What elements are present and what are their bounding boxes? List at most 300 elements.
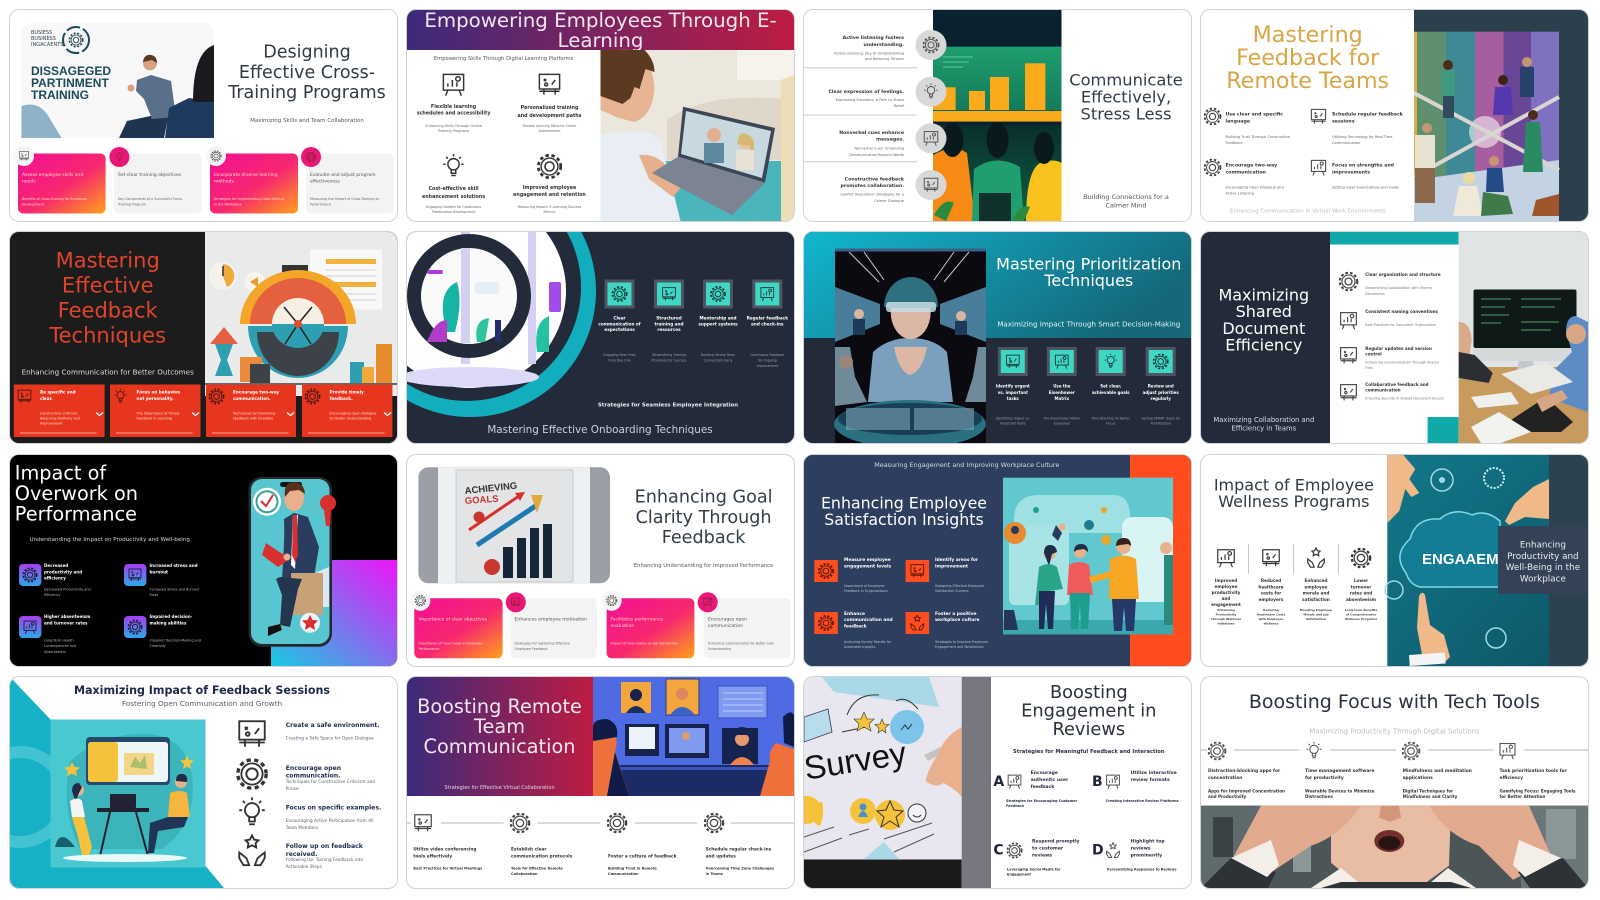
step: mentorship: support systems bbox=[698, 322, 738, 326]
item: specific examples: Encouraging Active Participation from All bbox=[286, 819, 374, 824]
illustration: bar chart and audience bbox=[933, 10, 1062, 220]
item: nonverbal cues: Nonverbal cues enhance bbox=[839, 130, 904, 136]
step: mindfulness: Digital Techniques for bbox=[1402, 788, 1453, 794]
tile: evaluate program bbox=[301, 146, 393, 213]
step: clear goals bbox=[1090, 347, 1131, 426]
callout: Workplace bbox=[1519, 574, 1565, 584]
step: mentorship bbox=[698, 280, 738, 362]
photo: team meeting around computer bbox=[1458, 232, 1588, 443]
step: time management: Wearable Devices to Minimize bbox=[1304, 788, 1374, 794]
item: nonverbal cues bbox=[839, 123, 946, 156]
item: clear language: Use clear and specific bbox=[1225, 112, 1283, 117]
item: specific examples: Team Members bbox=[285, 825, 319, 831]
tile: two-way communication bbox=[206, 384, 296, 437]
title: Effectively, bbox=[1081, 87, 1171, 106]
step: task prioritization: Task prioritization tools for bbox=[1499, 769, 1566, 774]
step: urgent vs important: Important Tasks bbox=[1000, 422, 1026, 426]
panel: Boosting Focus with Tech Tools bbox=[1200, 677, 1588, 888]
title: Shared bbox=[1235, 302, 1291, 321]
illustration: feedback gauge bbox=[205, 232, 397, 396]
item: improved engagement: Improved employee bbox=[523, 186, 576, 190]
step: video conferencing: Utilize video conferencing bbox=[413, 848, 476, 852]
step: review priorities bbox=[1141, 347, 1181, 426]
item: decreased productivity: Efficiency bbox=[44, 593, 60, 597]
column: productivity: and bbox=[1221, 596, 1230, 600]
column: productivity: Initiatives bbox=[1217, 621, 1234, 625]
item: strengths bbox=[1311, 160, 1399, 189]
subtitle: Maximizing Impact Through Smart Decision-Making bbox=[997, 319, 1180, 328]
item: active listening: and Reducing Tension bbox=[865, 57, 904, 61]
tile: assess employee skills bbox=[14, 146, 106, 213]
footer note: Enhancing Communication in Virtual Work Environments bbox=[1229, 208, 1385, 214]
item A: authentic user bbox=[1031, 777, 1069, 783]
tile: clear objectives: Performance bbox=[418, 647, 439, 651]
step: urgent vs important bbox=[996, 347, 1030, 426]
item: nonverbal cues: Nonverbal Cues: Enhancing bbox=[854, 146, 904, 150]
tile: focus on behavior bbox=[110, 384, 200, 437]
column: turnover: Wellness Programs bbox=[1344, 616, 1377, 620]
subtitle: Empowering Skills Through Digital Learning Platforms bbox=[434, 56, 574, 62]
title: Maximizing Impact of Feedback Sessions bbox=[74, 684, 330, 697]
tile: timely feedback: feedback. bbox=[330, 396, 353, 401]
item: strengths: Setting Clear Expectations and Goals bbox=[1332, 185, 1399, 189]
step: check-ins bbox=[705, 814, 774, 876]
photo: disaggregated training session bbox=[22, 22, 214, 138]
item: collaborative feedback: communication bbox=[1365, 388, 1400, 392]
title: Impact of Employee bbox=[1213, 475, 1373, 494]
item: positive culture bbox=[906, 610, 988, 648]
column: productivity: Through Wellness bbox=[1210, 616, 1241, 620]
title: Mastering bbox=[1252, 22, 1362, 48]
title: Designing bbox=[263, 42, 351, 62]
step: distraction-blocking: Distraction-blocking apps for bbox=[1208, 769, 1280, 774]
item: communication and feedback: communication and bbox=[844, 617, 893, 623]
step: regular feedback: for Ongoing bbox=[758, 358, 777, 362]
title: Engagement in bbox=[1021, 700, 1156, 722]
column: morale bbox=[1299, 547, 1332, 620]
step: communication protocols: Collaboration bbox=[511, 872, 538, 876]
item: specific examples: Focus on specific examples. bbox=[286, 804, 381, 812]
step: mindfulness: Mindfulness and Clarity bbox=[1402, 794, 1457, 799]
title: Satisfaction Insights bbox=[824, 510, 984, 529]
item: version control: Enhancing Communication Through Shared bbox=[1365, 360, 1439, 364]
column: turnover: absenteeism bbox=[1345, 596, 1376, 601]
item: safe environment bbox=[239, 721, 380, 747]
column: productivity bbox=[1210, 549, 1241, 625]
item: open communication: communication. bbox=[286, 772, 341, 780]
step: culture of feedback: Building Trust in Remote bbox=[608, 866, 657, 870]
subtitle: Strategies for Seamless Employee Integration bbox=[598, 402, 738, 408]
tile: open communication: Enhancing Communication for Better Goal bbox=[708, 641, 773, 645]
tile: focus on behavior: Feedback in Learning bbox=[136, 416, 172, 420]
tile: assess employee skills: needs bbox=[22, 178, 36, 184]
column: healthcare costs: Healthcare Costs bbox=[1256, 612, 1285, 616]
item: identify improvement: Designing Effective Employee bbox=[935, 584, 984, 588]
subtitle: Fostering Open Communication and Growth bbox=[122, 699, 282, 708]
step: structured training: resources bbox=[657, 327, 681, 332]
callout: Productivity and bbox=[1507, 551, 1578, 561]
item: communication and feedback: feedback bbox=[844, 623, 867, 629]
tile: clear objectives: Importance of clear objectives bbox=[418, 616, 488, 622]
illustration: team connected by ropes bbox=[1414, 10, 1588, 220]
step: video conferencing bbox=[413, 815, 482, 870]
step: task prioritization: efficiency bbox=[1499, 775, 1523, 781]
item: two-way communication bbox=[1204, 159, 1283, 195]
column: healthcare costs bbox=[1256, 549, 1285, 625]
step: structured training: training and bbox=[654, 322, 684, 326]
item: increased stress: Increased Stress and Burnout bbox=[150, 587, 200, 591]
item: flexible learning: schedules and accessibility bbox=[417, 110, 491, 116]
item C: to customer bbox=[1032, 846, 1064, 852]
step: clear communication: from Day One bbox=[608, 358, 631, 362]
title: Training Programs bbox=[227, 83, 386, 103]
step: Eisenhower matrix: Explained bbox=[1054, 422, 1070, 426]
tile: open communication: communication bbox=[708, 623, 743, 629]
step: urgent vs important: vs. important bbox=[998, 390, 1028, 395]
photo: man looking through binoculars of hands bbox=[1200, 806, 1588, 888]
step: review priorities: adjust priorities bbox=[1143, 390, 1179, 395]
item: increased stress: Risks bbox=[150, 593, 159, 597]
item C bbox=[993, 838, 1080, 876]
item: nonverbal cues: messages. bbox=[876, 137, 904, 142]
item: communication and feedback bbox=[814, 610, 893, 648]
item: clear expression bbox=[828, 76, 946, 108]
title: Impact of bbox=[15, 461, 106, 484]
step: communication protocols: Establish clear bbox=[511, 848, 547, 852]
step: Eisenhower matrix: Eisenhower bbox=[1049, 390, 1075, 395]
item A: Feedback bbox=[1006, 804, 1025, 808]
step: mentorship: Connections Early bbox=[704, 358, 732, 362]
item: safe environment: Create a safe environment. bbox=[286, 722, 380, 729]
illustration: concentric circle with app screens bbox=[344, 165, 596, 417]
step: time management: Distractions bbox=[1304, 794, 1333, 799]
item: schedule feedback bbox=[1311, 109, 1403, 144]
step: time management bbox=[1304, 742, 1374, 799]
step: urgent vs important: Identify urgent bbox=[996, 384, 1030, 388]
step: regular feedback bbox=[747, 280, 788, 368]
step: check-ins: in Teams bbox=[706, 872, 723, 876]
title: Mastering bbox=[56, 248, 160, 272]
step: clear goals: Time Blocking for Better bbox=[1091, 416, 1130, 420]
item: clear language: language bbox=[1225, 118, 1250, 124]
item: identify improvement: Identify areas for bbox=[935, 558, 978, 562]
column: morale: Enhanced bbox=[1304, 578, 1327, 582]
column: healthcare costs: with Employee bbox=[1258, 616, 1283, 620]
photo: disaggregated training session: BUSINESS bbox=[31, 36, 56, 42]
item: strengths: Focus on strengths and bbox=[1332, 163, 1394, 168]
item: follow up bbox=[239, 835, 364, 870]
title: Boosting bbox=[1050, 682, 1128, 703]
item: cost-effective: Cost-effective skill bbox=[429, 186, 479, 192]
photo: hand filling in survey: Survey bbox=[804, 734, 909, 787]
tile: performance evaluation bbox=[602, 590, 694, 658]
item: naming conventions bbox=[1340, 309, 1438, 329]
step: regular feedback: and check-ins bbox=[751, 322, 784, 326]
step: video conferencing: tools effectively bbox=[413, 854, 452, 860]
panel: Impact of Overwork on Performance bbox=[10, 454, 397, 666]
item: flexible learning: Enhancing Skills Through Online bbox=[425, 124, 482, 128]
illustration: achieving goals poster: ACHIEVING bbox=[464, 480, 518, 496]
panel: Maximizing Shared Document Efficiency bbox=[1200, 232, 1588, 443]
tile: be specific: Balancing Positivity and bbox=[40, 416, 80, 420]
illustration: businessman on a smartphone bbox=[248, 476, 336, 646]
tile: performance evaluation: evaluation bbox=[610, 623, 634, 629]
column: productivity: Productivity bbox=[1215, 612, 1236, 616]
item: cost-effective: Professional Development bbox=[432, 210, 476, 214]
step: task prioritization: Gamifying Focus: Engaging Tools bbox=[1499, 788, 1575, 794]
item: two-way communication: Active Listening bbox=[1225, 191, 1254, 195]
subtitle: Calmer Mind bbox=[1105, 201, 1147, 209]
item B: review formats bbox=[1131, 777, 1170, 783]
column: turnover: rates and bbox=[1349, 590, 1372, 595]
item: positive culture: Strategies to Improve Employee bbox=[935, 640, 988, 644]
title: Reviews bbox=[1052, 719, 1125, 740]
tile: be specific: Improvement bbox=[40, 422, 63, 426]
item: communication and feedback: Actionable Insights bbox=[844, 644, 876, 648]
title: Team bbox=[473, 715, 525, 738]
item: collaborative feedback: Ensuring Security in Shared Document Access bbox=[1365, 396, 1443, 400]
step: check-ins: Overcoming Time Zone Challenges bbox=[706, 866, 774, 870]
item: impaired decision-making bbox=[124, 614, 201, 648]
item: flexible learning: Training Programs bbox=[437, 128, 470, 132]
item: open communication bbox=[238, 760, 375, 792]
step: mindfulness: applications bbox=[1402, 775, 1433, 781]
item: safe environment: Creating a Safe Space for Open Dialogue bbox=[286, 736, 374, 742]
item: increased stress bbox=[124, 562, 200, 597]
step: review priorities: Setting SMART Goals for bbox=[1141, 416, 1180, 420]
item: schedule feedback: Schedule regular feedback bbox=[1332, 112, 1402, 117]
step: Eisenhower matrix: Matrix bbox=[1055, 396, 1069, 401]
step: check-ins: and updates bbox=[706, 854, 736, 860]
step: structured training bbox=[652, 280, 687, 362]
title: Efficiency bbox=[1225, 336, 1302, 355]
item A: A bbox=[993, 774, 1004, 790]
item B bbox=[1092, 770, 1179, 803]
illustration: two colleagues at a screen bbox=[0, 677, 224, 888]
item: personalized training: Flexible Learning Paths for Career bbox=[523, 124, 576, 128]
illustration: engagement hands on teal: ENGAAEMI bbox=[1422, 550, 1502, 568]
step: regular feedback: Regular feedback bbox=[747, 316, 788, 320]
title: Techniques bbox=[48, 324, 166, 348]
item: collaborative feedback: Collaborative feedback and bbox=[1365, 382, 1428, 387]
column: healthcare costs: costs for bbox=[1260, 590, 1282, 595]
step: clear communication: Clear bbox=[613, 316, 626, 320]
subtitle: Enhancing Communication for Better Outcomes bbox=[22, 368, 194, 376]
item: naming conventions: Best Practices for Document Organization bbox=[1365, 323, 1436, 327]
illustration: engagement hands on teal bbox=[1384, 454, 1588, 666]
item D: reviews bbox=[1131, 846, 1151, 852]
step: urgent vs important: Identifying Urgent vs. bbox=[996, 416, 1030, 420]
illustration: achieving goals poster: GOALS bbox=[464, 493, 499, 506]
column: healthcare costs: Wellness bbox=[1263, 621, 1278, 625]
step: time management: for productivity bbox=[1304, 775, 1343, 781]
step: culture of feedback: Communication bbox=[608, 872, 639, 876]
item: positive culture: Foster a positive bbox=[935, 612, 976, 616]
item: strengths: improvements bbox=[1332, 169, 1370, 175]
column: morale: employee bbox=[1304, 584, 1327, 589]
panel: Communicate Effectively, Stress Less bbox=[804, 10, 1191, 220]
tile: performance evaluation: Impact of Goal Clarity on Job Satisfaction bbox=[610, 641, 678, 645]
item: decreased productivity: Decreased bbox=[44, 562, 68, 568]
panel: Boosting Remote Team Communication bbox=[407, 677, 794, 888]
step: task prioritization bbox=[1499, 744, 1575, 799]
step: clear communication: communication of bbox=[598, 322, 641, 326]
item B: B bbox=[1092, 774, 1103, 790]
tile: evaluate program: effectiveness bbox=[310, 178, 341, 184]
tile: open communication bbox=[698, 592, 790, 658]
panel: Mastering Feedback for Remote Teams bbox=[1200, 10, 1588, 220]
step: mentorship: Mentorship and bbox=[699, 316, 737, 320]
column: productivity: productivity bbox=[1211, 590, 1240, 594]
item: cost-effective bbox=[422, 154, 485, 214]
column: healthcare costs: Reducing bbox=[1263, 608, 1278, 612]
item: constructive feedback: Conflict Resolution: Strategies for a bbox=[840, 192, 904, 196]
item: schedule feedback: sessions bbox=[1332, 118, 1354, 124]
item: nonverbal cues: Communication Beyond Words bbox=[849, 152, 904, 156]
item: personalized training: and development paths bbox=[517, 112, 582, 118]
item: higher absenteeism: Absenteeism bbox=[44, 649, 67, 653]
tile: set clear objectives: Training Program bbox=[117, 202, 146, 206]
step: mindfulness: Mindfulness and meditation bbox=[1402, 769, 1471, 774]
item: collaborative feedback bbox=[1340, 382, 1443, 400]
item: decreased productivity: productivity and bbox=[44, 569, 82, 574]
step: clear goals: achievable goals bbox=[1092, 390, 1130, 395]
step: regular feedback: Improvement bbox=[757, 364, 779, 368]
item: personalized training: Personalized training bbox=[521, 106, 578, 110]
header note: Measuring Engagement and Improving Workplace Culture bbox=[874, 460, 1059, 468]
column: morale: morale and bbox=[1302, 590, 1329, 595]
title: Remote Teams bbox=[1226, 68, 1389, 94]
panel: Designing Effective Cross-Training Programs bbox=[10, 10, 397, 220]
item: clear organization: Streamlining Collaboration with Shared bbox=[1365, 286, 1431, 290]
item: constructive feedback: Constructive feedback bbox=[845, 177, 904, 182]
item D: D bbox=[1092, 842, 1104, 858]
step: clear goals: Focus bbox=[1106, 422, 1116, 426]
title: Enhancing Employee bbox=[821, 493, 987, 512]
tile: diverse learning methods: Strategies for Implementing Cross-Training bbox=[214, 196, 284, 200]
item: active listening: understanding. bbox=[864, 42, 904, 48]
column: healthcare costs: employers bbox=[1258, 596, 1283, 601]
item: clear organization: Documents bbox=[1365, 292, 1384, 296]
item B: Creating Interactive Review Platforms bbox=[1106, 799, 1179, 803]
item: positive culture: Engagement and Satisfaction bbox=[935, 644, 984, 648]
panel: Maximizing Impact of Feedback Sessions bbox=[10, 677, 397, 888]
tile: diverse learning methods: methods bbox=[214, 178, 234, 184]
item: measure engagement: Importance of Employee bbox=[844, 584, 884, 588]
tile: timely feedback: for Better Understanding bbox=[330, 416, 371, 420]
subtitle: Maximizing Productivity Through Digital Solutions bbox=[1309, 728, 1479, 736]
title: Mastering Effective Onboarding Techniques bbox=[487, 424, 713, 436]
item A bbox=[993, 770, 1077, 808]
tile: diverse learning methods bbox=[206, 146, 298, 213]
item: higher absenteeism bbox=[19, 614, 90, 653]
item: open communication: Encourage open bbox=[286, 765, 341, 772]
photo: disaggregated training session: BUSIESS bbox=[31, 30, 52, 36]
tile: two-way communication: Encourage two-way bbox=[233, 390, 279, 394]
title: Overwork on bbox=[15, 482, 138, 504]
step: regular feedback: Continuous Feedback bbox=[750, 353, 784, 357]
item: measure engagement: engagement levels bbox=[844, 563, 891, 569]
title: Mastering Prioritization bbox=[996, 254, 1181, 274]
title: Clarity Through bbox=[636, 507, 772, 527]
illustration: colleagues shaking hands bbox=[1003, 477, 1173, 634]
item A: Strategies for Encouraging Customer bbox=[1006, 799, 1077, 803]
panel: Empowering Employees Through E-Learning bbox=[407, 10, 794, 220]
step: Eisenhower matrix bbox=[1043, 347, 1080, 426]
item: active listening: Active Listening: Key to Understanding bbox=[834, 51, 904, 55]
item: two-way communication: Encouraging Open Dialogue and bbox=[1225, 185, 1283, 189]
item C: C bbox=[993, 842, 1004, 858]
illustration: achieving goals poster bbox=[418, 467, 610, 583]
title: Effective Cross- bbox=[239, 62, 375, 82]
title: Communicate bbox=[1069, 70, 1183, 89]
step: mindfulness bbox=[1402, 743, 1471, 799]
tile: evaluate program: Evaluate and adjust program bbox=[310, 172, 375, 177]
header banner: Learning bbox=[558, 28, 643, 52]
step: task prioritization: for Better Attention bbox=[1499, 794, 1545, 799]
item: clear language: Feedback bbox=[1225, 140, 1243, 144]
step: distraction-blocking: and Productivity bbox=[1208, 794, 1246, 799]
subtitle: Building Connections for a bbox=[1083, 192, 1169, 200]
item: cost-effective: Engaging Content for Continuous bbox=[426, 204, 481, 208]
item: higher absenteeism: Higher absenteeism bbox=[44, 614, 90, 618]
item: communication and feedback: Enhance bbox=[844, 612, 865, 616]
item: follow up: Actionable Steps bbox=[286, 864, 323, 870]
step: structured training: Processes for Success bbox=[652, 358, 687, 362]
item: positive culture: workplace culture bbox=[935, 617, 980, 623]
item: measure engagement: Feedback in Organizations bbox=[844, 588, 888, 592]
item: constructive feedback bbox=[840, 170, 946, 202]
item: clear expression: Expressing Emotions: A Path to Stress bbox=[836, 98, 904, 102]
item: clear expression: Clear expression of feelings. bbox=[828, 88, 904, 94]
step: communication protocols: communication protocols bbox=[511, 854, 573, 860]
tile: assess employee skills: Benefits of Cross-Training for Employee bbox=[22, 196, 87, 200]
title: Performance bbox=[15, 502, 137, 525]
step: time management: Time management software bbox=[1304, 769, 1374, 774]
column: turnover: of Comprehensive bbox=[1345, 612, 1376, 616]
step: review priorities: regularly bbox=[1150, 396, 1171, 401]
item: active listening: Active listening fosters bbox=[843, 36, 904, 40]
tile: diverse learning methods: Incorporate diverse learning bbox=[214, 172, 278, 177]
panel: Mastering Effective Feedback Techniques bbox=[10, 232, 397, 443]
subtitle: Maximizing Skills and Team Collaboration bbox=[250, 118, 364, 124]
item: identify improvement: improvement bbox=[935, 563, 968, 569]
item D: Highlight top bbox=[1131, 840, 1165, 844]
item: impaired decision-making: making abilities bbox=[150, 620, 187, 625]
step: distraction-blocking bbox=[1208, 743, 1285, 799]
item: increased stress: Increased stress and bbox=[150, 562, 198, 568]
item: version control bbox=[1340, 346, 1439, 370]
item: measure engagement bbox=[814, 556, 891, 592]
item: flexible learning: Flexible learning bbox=[431, 104, 476, 110]
panel: Mastering Effective Onboarding Techniques bbox=[407, 232, 794, 443]
item A: feedback bbox=[1031, 784, 1055, 790]
subtitle: Efficiency in Teams bbox=[1231, 424, 1296, 432]
item: follow up: Follow up on feedback bbox=[286, 843, 363, 850]
title: Enhancing Goal bbox=[635, 487, 773, 507]
item C: Engagement bbox=[1007, 872, 1031, 876]
tile: be specific: Be specific and bbox=[40, 390, 76, 394]
tile: set clear objectives: Key Components of a Successful Cross- bbox=[118, 196, 183, 200]
item: improved engagement: Measuring Impact: E-Learning Success bbox=[518, 204, 581, 208]
step: structured training: Structured bbox=[656, 316, 682, 320]
item: follow up: received. bbox=[286, 851, 317, 858]
tile: be specific bbox=[14, 384, 105, 437]
item: improved engagement: engagement and retention bbox=[513, 191, 586, 197]
tile: employee motivation bbox=[506, 592, 597, 658]
item: constructive feedback: Calmer Dialogue bbox=[874, 198, 905, 202]
column: productivity: engagement bbox=[1211, 602, 1240, 606]
